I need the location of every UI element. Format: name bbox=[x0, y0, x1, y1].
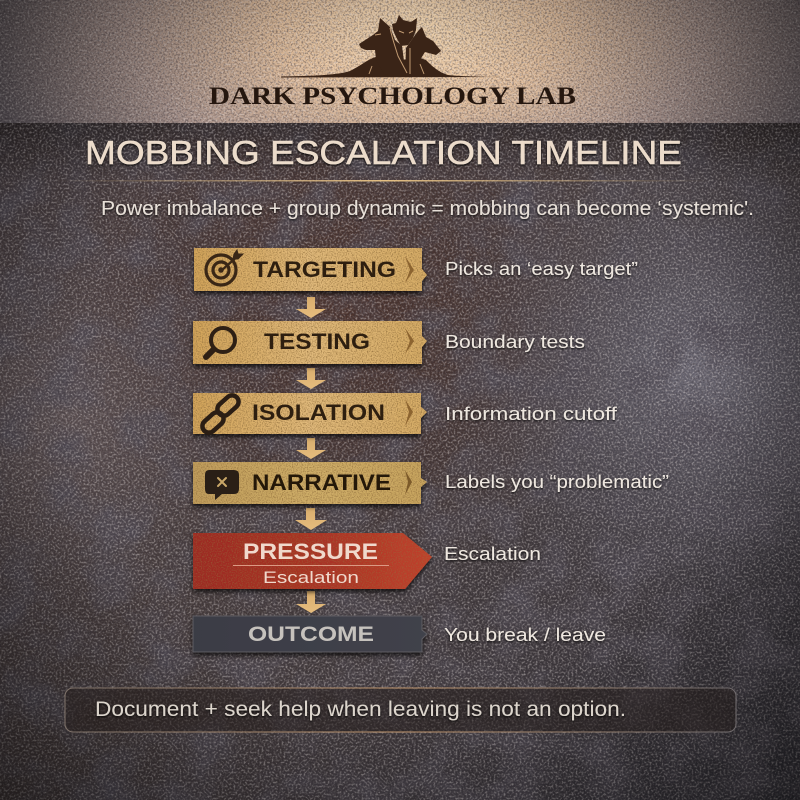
icon: chain link bbox=[200, 393, 241, 435]
callout: advice bbox=[65, 688, 736, 732]
sublabel: escalation: Escalation bbox=[263, 568, 359, 587]
logo: Dark Psychology Lab bbox=[209, 15, 576, 110]
arrow: testing to isolation bbox=[296, 368, 326, 389]
step: testing bbox=[193, 321, 427, 364]
callout text: Document + seek help when leaving is not an option. bbox=[95, 697, 626, 721]
chevron bbox=[405, 399, 413, 426]
description: narrative: Labels you “problematic” bbox=[445, 471, 669, 492]
description: testing: Boundary tests bbox=[445, 331, 585, 352]
chevron bbox=[405, 256, 414, 283]
step: narrative bbox=[193, 462, 427, 504]
title: MOBBING ESCALATION TIMELINE bbox=[85, 134, 682, 171]
label: targeting: TARGETING bbox=[253, 257, 396, 282]
icon: speech bubble with x bbox=[205, 470, 239, 500]
description: pressure: Escalation bbox=[444, 543, 541, 564]
chevron bbox=[405, 328, 414, 354]
label: narrative: NARRATIVE bbox=[252, 470, 391, 495]
step: pressure bbox=[193, 533, 432, 589]
step: isolation bbox=[193, 393, 427, 435]
connector arrows bbox=[295, 297, 327, 613]
arrow: targeting to testing bbox=[296, 297, 326, 318]
subtitle: Power imbalance + group dynamic = mobbing can become ‘systemic'. bbox=[101, 198, 754, 220]
step: targeting bbox=[194, 248, 427, 291]
icon: magnifying glass bbox=[206, 328, 235, 357]
icon: target bbox=[206, 250, 243, 285]
label: outcome: OUTCOME bbox=[248, 623, 374, 646]
step: outcome bbox=[193, 616, 427, 652]
arrow: pressure to outcome bbox=[296, 591, 326, 613]
description: isolation: Information cutoff bbox=[445, 403, 618, 424]
icon: three-headed hound bbox=[281, 15, 510, 78]
label: testing: TESTING bbox=[264, 329, 370, 354]
arrow: isolation to narrative bbox=[296, 438, 326, 459]
arrow: narrative to pressure bbox=[295, 508, 327, 530]
label: isolation: ISOLATION bbox=[252, 400, 385, 425]
description: targeting: Picks an ‘easy target” bbox=[445, 258, 638, 279]
label: pressure: PRESSURE bbox=[243, 539, 378, 564]
chevron bbox=[405, 470, 412, 495]
divider line under title bbox=[55, 180, 715, 182]
logo wordmark: DARK PSYCHOLOGY LAB bbox=[209, 83, 576, 110]
description: outcome: You break / leave bbox=[444, 624, 606, 645]
